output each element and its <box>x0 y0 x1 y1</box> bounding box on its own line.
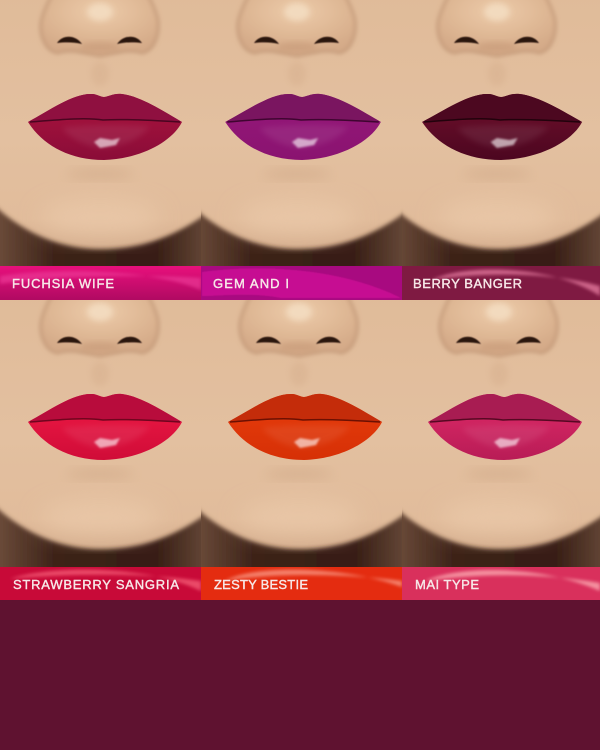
label bar: gem and i <box>201 266 402 300</box>
panel: strawberry sangria <box>0 294 232 600</box>
label bar: strawberry sangria <box>0 567 201 600</box>
label bar: mai type <box>402 567 600 600</box>
label bar: fuchsia wife: FUCHSIA WIFE <box>12 276 114 291</box>
label bar: berry banger: BERRY BANGER <box>413 276 522 291</box>
label bar: fuchsia wife <box>0 266 201 300</box>
panel: gem and i <box>177 0 429 300</box>
label bar: berry banger <box>402 266 600 300</box>
label bar: zesty bestie: ZESTY BESTIE <box>214 577 308 592</box>
panel: fuchsia wife <box>0 0 232 300</box>
label bar: zesty bestie <box>201 567 402 600</box>
label bar: strawberry sangria: STRAWBERRY SANGRIA <box>13 577 179 592</box>
label bar: mai type: MAI TYPE <box>415 577 479 592</box>
panel: berry banger <box>377 0 600 300</box>
panel: zesty bestie <box>179 294 431 600</box>
panel: mai type <box>379 294 600 600</box>
label bar: gem and i: GEM AND I <box>213 276 289 291</box>
